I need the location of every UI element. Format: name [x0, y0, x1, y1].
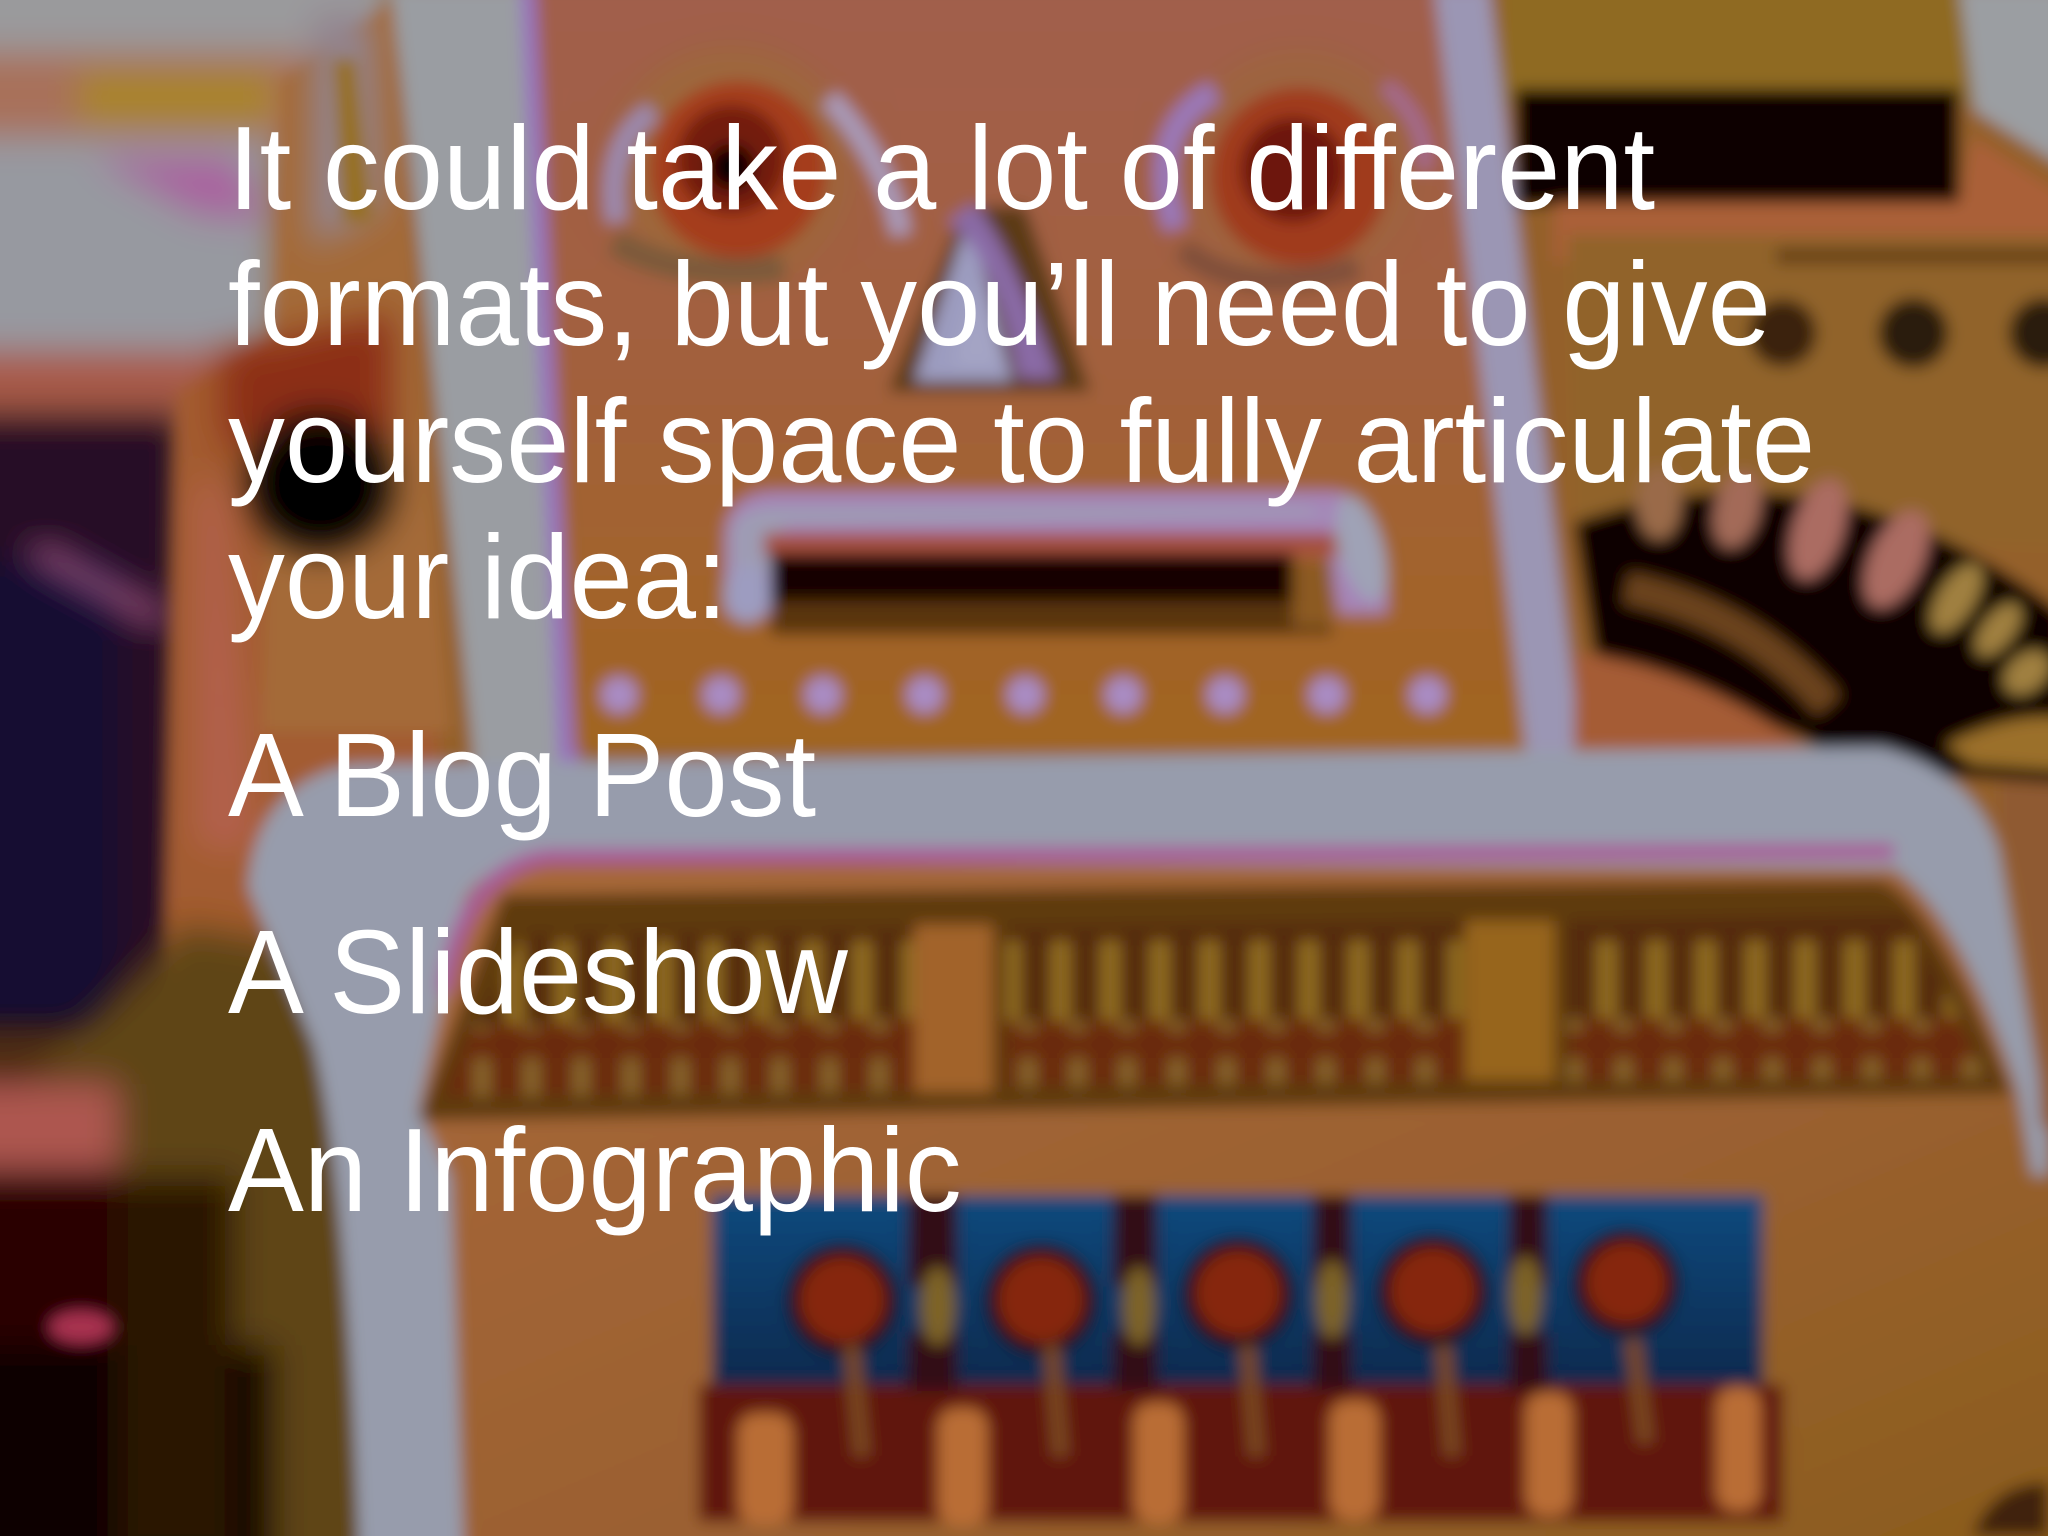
icon: row of face rivets — [601, 677, 1446, 713]
icon: robot right eye — [1165, 48, 1424, 280]
text: a blog post: A Blog Post — [228, 710, 816, 842]
panel: control board — [699, 1195, 1783, 1526]
icon: pink streak — [33, 549, 163, 620]
panel: right of body frame — [1998, 784, 2048, 1149]
decorative pink inner edge — [444, 852, 1894, 993]
panel: robot face — [536, 0, 1535, 751]
panel: upper-right machine — [1502, 0, 2048, 549]
text block: intro paragraph: your idea: — [228, 512, 728, 644]
panel: upper-left background — [0, 0, 392, 1051]
icon: pink glow — [50, 1311, 112, 1343]
text block: intro paragraph: yourself space to fully articulate — [228, 376, 1815, 508]
icon: robot left eye — [614, 46, 901, 281]
icon: lower-right knob — [1972, 1482, 2048, 1536]
icon: robot nose — [888, 202, 1091, 392]
panel: lower-left background — [0, 927, 379, 1536]
text block: intro paragraph — [228, 103, 1815, 644]
text block: intro paragraph: formats, but you’ll need to give — [228, 239, 1771, 371]
panel: face right edge band — [1434, 0, 1583, 771]
text block: intro paragraph: It could take a lot of different — [228, 103, 1655, 235]
text: an infographic: An Infographic — [228, 1105, 962, 1237]
panel: speaker grille — [418, 882, 2011, 1121]
icon: toothed dark arc — [1574, 466, 2048, 784]
icon: robot mouth — [724, 490, 1397, 635]
panel: robot body frame — [248, 747, 2048, 1536]
panel: robot body inner — [418, 862, 2048, 1536]
panel: left column — [163, 0, 581, 1071]
text: a slideshow: A Slideshow — [228, 907, 848, 1039]
